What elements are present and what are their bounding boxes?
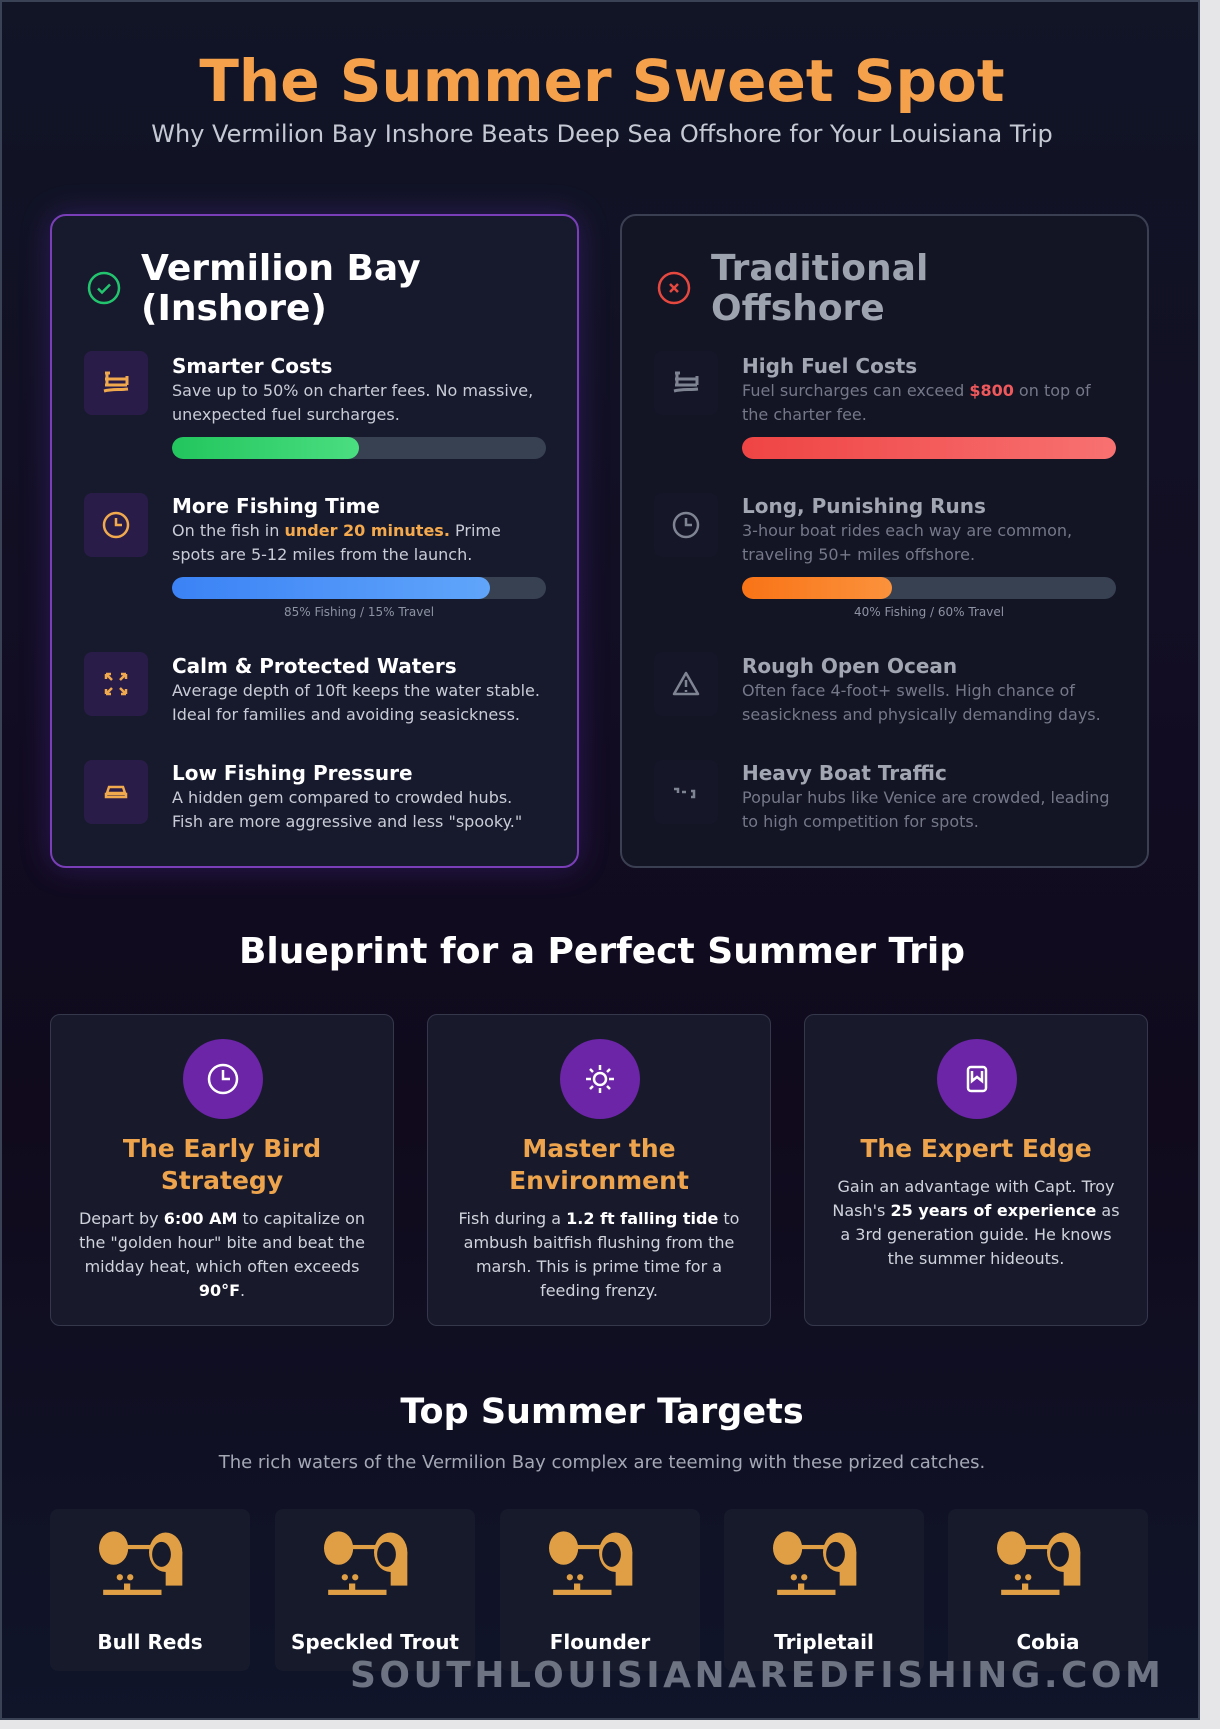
panel: Traditional offshore: to high competition for spots.: [742, 812, 979, 831]
panel: Traditional offshore: 40% Fishing / 60% Travel: [854, 605, 1004, 619]
fish: Tripletail: Tripletail: [774, 1630, 874, 1654]
panel: Traditional offshore: Fuel surcharges can exceed $800 on top of: [742, 381, 1091, 400]
panel: Vermilion Bay inshore: A hidden gem compared to crowded hubs.: [172, 788, 512, 807]
heading: [711, 248, 928, 329]
watermark: SOUTHLOUISIANAREDFISHING.COM: [350, 1655, 1164, 1696]
bar: costs: [172, 437, 546, 459]
fish: Flounder: Flounder: [550, 1630, 650, 1654]
title: The Summer Sweet Spot: [199, 47, 1005, 115]
icon: sun: [560, 1039, 640, 1119]
panel: Traditional offshore: [620, 214, 1149, 868]
item: Smarter Costs: Smarter Costs: [172, 354, 332, 378]
panel: Vermilion Bay inshore: unexpected fuel surcharges.: [172, 405, 400, 424]
card: expert edge: [804, 1014, 1148, 1326]
fish: Cobia: [948, 1509, 1148, 1671]
icon: gem: [84, 760, 148, 824]
icon: clock: [654, 493, 718, 557]
fish: Tripletail: [724, 1509, 924, 1671]
panel: Vermilion Bay inshore: On the fish in under 20 minutes. Prime: [172, 521, 501, 540]
fish: Bull Reds: [50, 1509, 250, 1671]
item: High fuel: High Fuel Costs: [742, 354, 917, 378]
fish: Bull Reds: Bull Reds: [97, 1630, 203, 1654]
card: early bird: Strategy: [161, 1166, 283, 1195]
heading: (Inshore): [141, 288, 327, 329]
panel: Traditional offshore: Popular hubs like Venice are crowded, leading: [742, 788, 1110, 807]
icon: check circle: [88, 272, 120, 304]
item: More Fishing Time: More Fishing Time: [172, 494, 380, 518]
heading: Vermilion Bay: [141, 248, 421, 289]
icon: warning: [654, 652, 718, 716]
icon: arrows: [84, 652, 148, 716]
panel: Vermilion Bay inshore: [50, 214, 579, 868]
bar: runs: [742, 577, 1116, 599]
icon: x circle: [658, 272, 690, 304]
bar: fishing time: [172, 577, 546, 599]
fish: Speckled Trout: Speckled Trout: [291, 1630, 459, 1654]
item: Rough ocean: Rough Open Ocean: [742, 654, 957, 678]
card: early bird: Depart by 6:00 AM to capitalize on the "golden hour" bite and beat the midday heat, which often exceeds 90°F.: [79, 1209, 365, 1300]
panel: Vermilion Bay inshore: Average depth of 10ft keeps the water stable.: [172, 681, 540, 700]
panel: Traditional offshore: traveling 50+ miles offshore.: [742, 545, 975, 564]
item: Calm waters: Calm & Protected Waters: [172, 654, 457, 678]
card: environment: [427, 1014, 771, 1326]
item: Heavy traffic: Heavy Boat Traffic: [742, 761, 947, 785]
heading: targets: Top Summer Targets: [400, 1392, 804, 1432]
panel: Traditional offshore: the charter fee.: [742, 405, 867, 424]
icon: fuel: [654, 351, 718, 415]
heading: blueprint: Blueprint for a Perfect Summer Trip: [239, 931, 965, 972]
subtitle: targets: The rich waters of the Vermilion Bay complex are teeming with these prized catches.: [219, 1452, 985, 1473]
panel: Traditional offshore: Often face 4-foot+ swells. High chance of: [742, 681, 1075, 700]
panel: Vermilion Bay inshore: Ideal for families and avoiding seasickness.: [172, 705, 520, 724]
card: environment: Master the: [522, 1134, 676, 1163]
icon: costs: [84, 351, 148, 415]
heading: Offshore: [711, 288, 885, 329]
panel: Vermilion Bay inshore: Fish are more aggressive and less "spooky.": [172, 812, 522, 831]
heading: [141, 248, 421, 329]
icon: traffic: [654, 760, 718, 824]
panel: Vermilion Bay inshore: Save up to 50% on charter fees. No massive,: [172, 381, 533, 400]
card: early bird: [50, 1014, 394, 1326]
icon: badge: [937, 1039, 1017, 1119]
card: early bird: The Early Bird: [123, 1134, 321, 1163]
fish: Cobia: Cobia: [1016, 1630, 1080, 1654]
card: environment: Fish during a 1.2 ft falling tide to ambush baitfish flushing from the marsh. This is prime time for a feeding frenzy.: [459, 1209, 739, 1300]
icon: clock: [84, 493, 148, 557]
card: environment: Environment: [509, 1166, 689, 1195]
card: expert edge: Gain an advantage with Capt. Troy Nash's 25 years of experience as a 3rd generation guide. He knows the summer hideouts.: [832, 1177, 1120, 1268]
card: expert edge: The Expert Edge: [860, 1134, 1092, 1163]
panel: Traditional offshore: seasickness and physically demanding days.: [742, 705, 1101, 724]
panel: Vermilion Bay inshore: 85% Fishing / 15% Travel: [284, 605, 434, 619]
heading: Traditional: [711, 248, 928, 289]
panel: Traditional offshore: 3-hour boat rides each way are common,: [742, 521, 1072, 540]
fish: Flounder: [500, 1509, 700, 1671]
item: Low pressure: Low Fishing Pressure: [172, 761, 413, 785]
bar: fuel: [742, 437, 1116, 459]
icon: clock: [183, 1039, 263, 1119]
item: Long runs: Long, Punishing Runs: [742, 494, 986, 518]
panel: Vermilion Bay inshore: spots are 5-12 miles from the launch.: [172, 545, 472, 564]
fish: Speckled Trout: [275, 1509, 475, 1671]
subtitle: Why Vermilion Bay Inshore Beats Deep Sea Offshore for Your Louisiana Trip: [151, 120, 1053, 148]
